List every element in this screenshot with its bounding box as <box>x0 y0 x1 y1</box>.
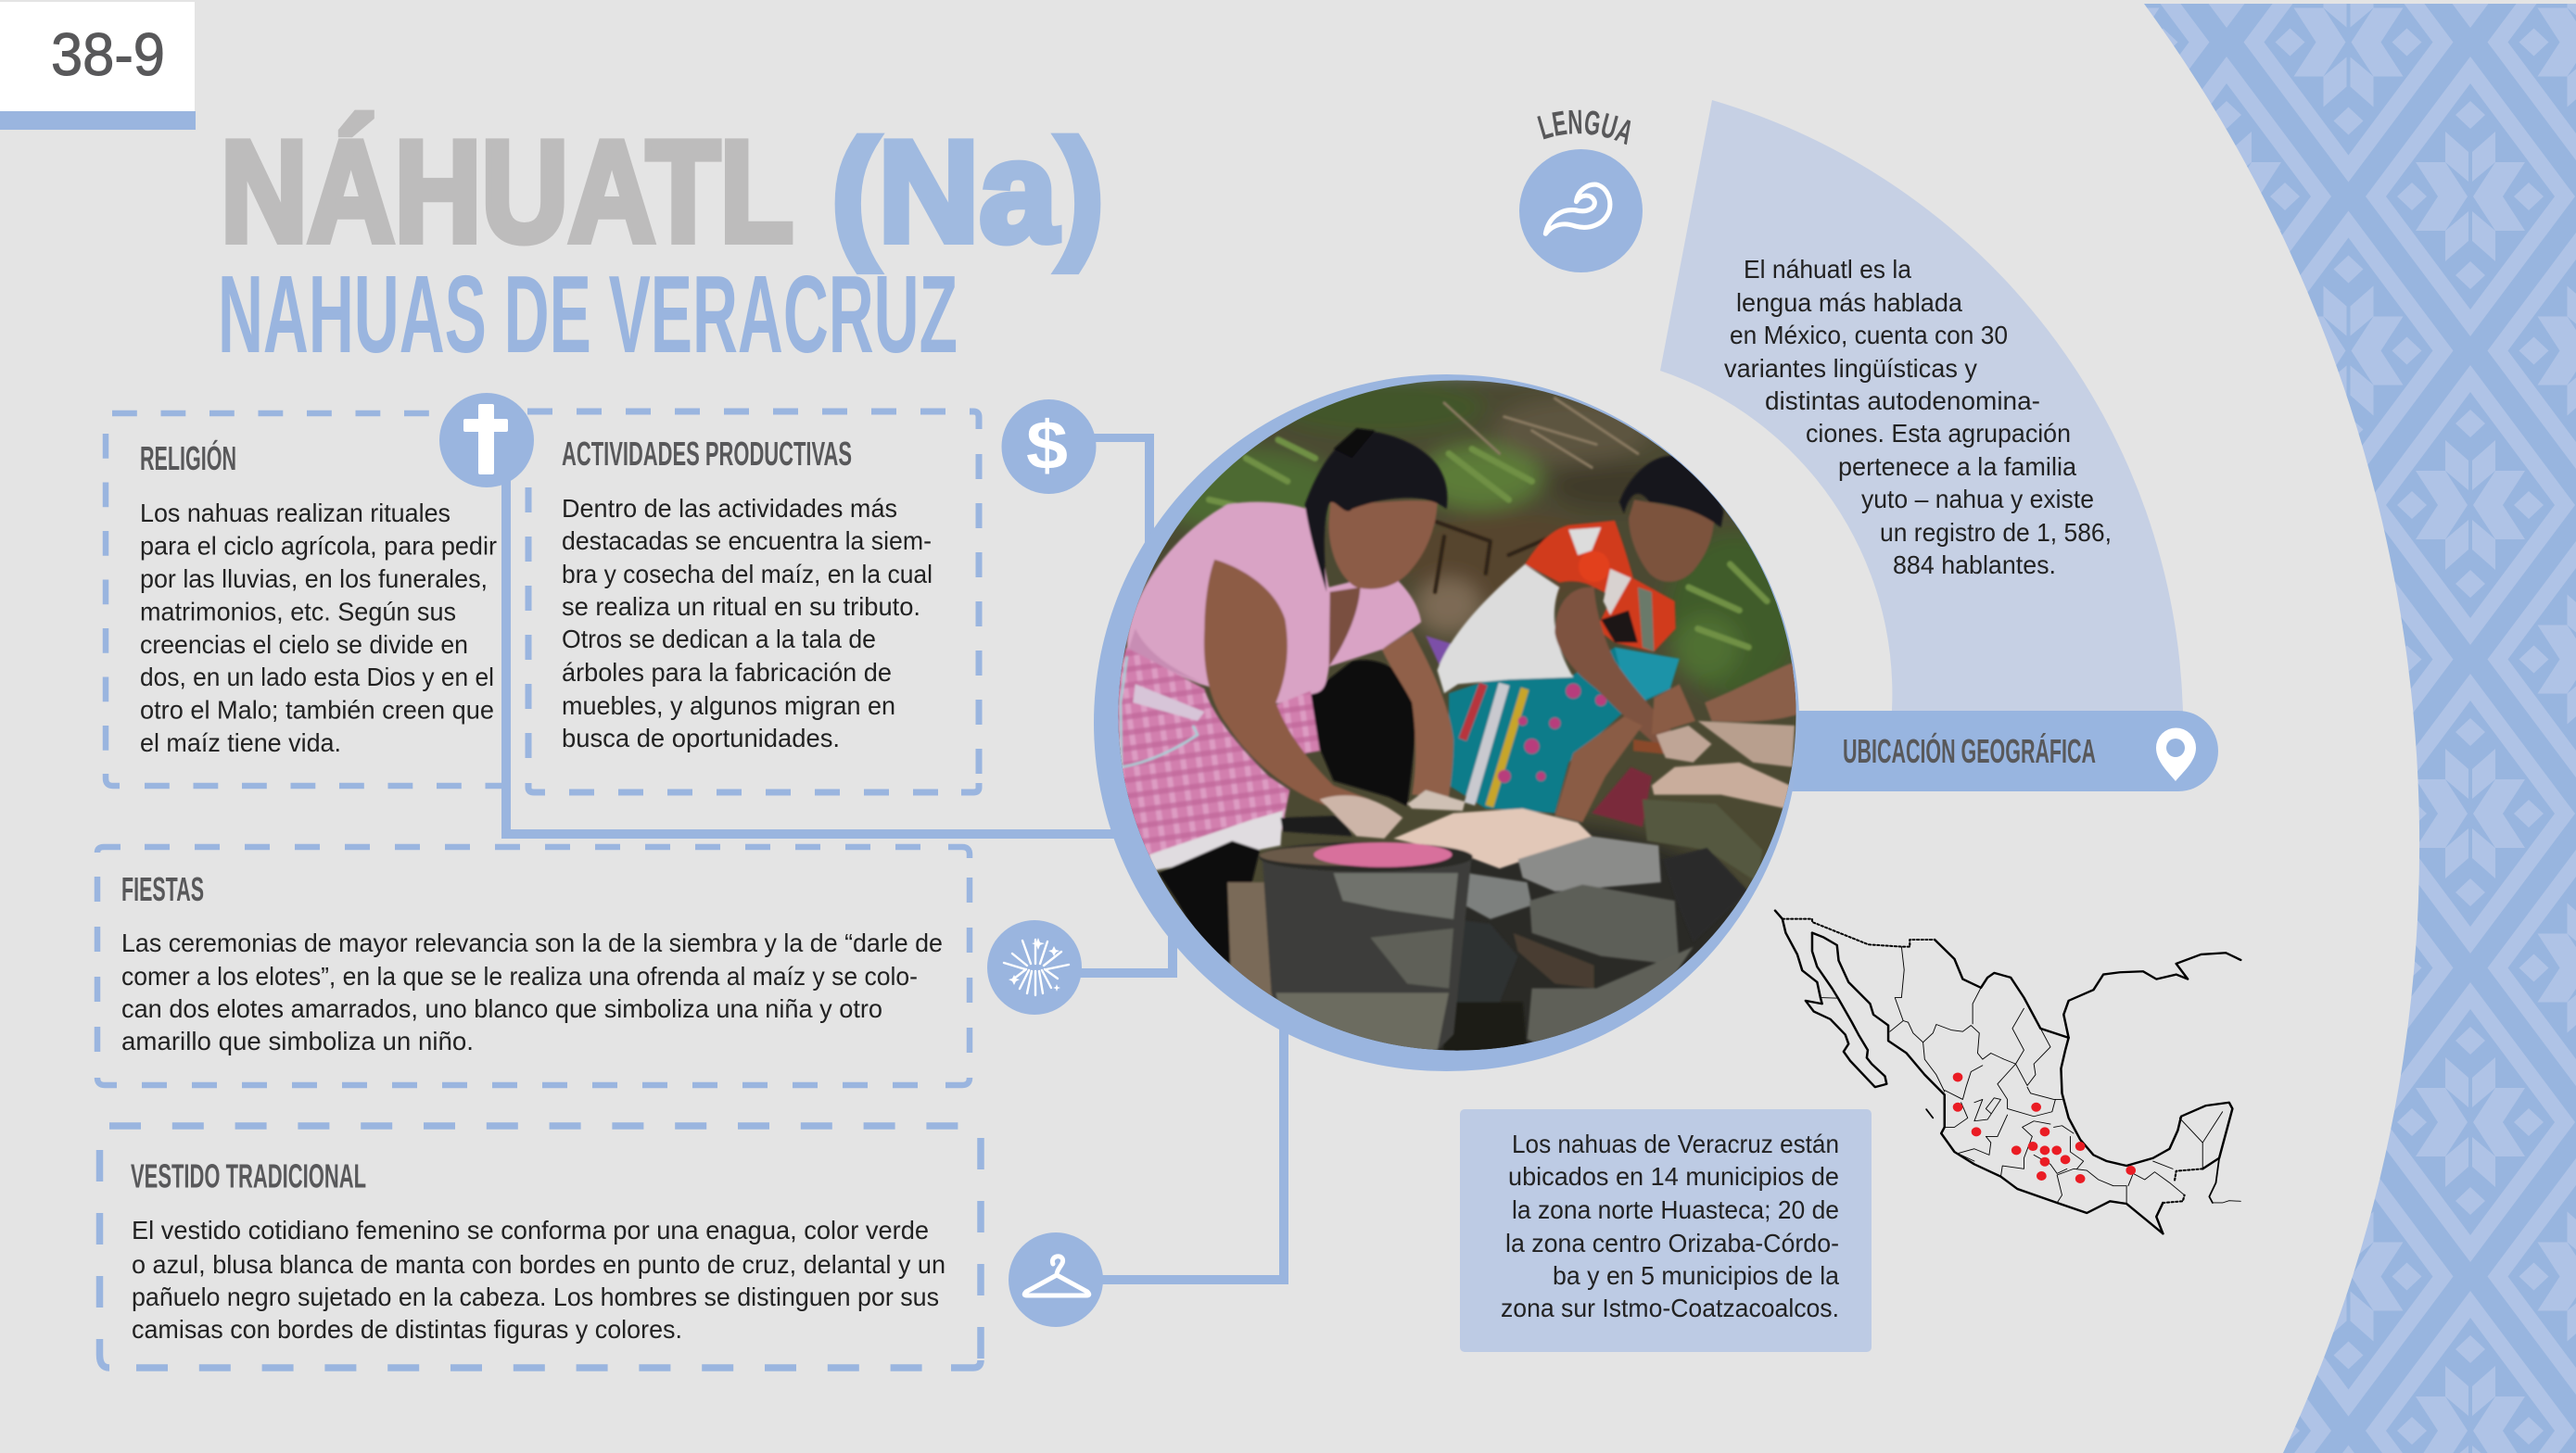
panel: religión <box>106 413 501 786</box>
icon: location pin <box>2156 728 2196 781</box>
text: vestido body <box>132 1216 945 1344</box>
icon: hanger <box>1009 1232 1103 1327</box>
basket <box>1426 635 1452 665</box>
panel: ubicación text box <box>1460 1109 1872 1352</box>
text: vestido body: pañuelo negro sujetado en la cabeza. Los hombres se distinguen por sus <box>132 1282 939 1311</box>
icon: speech scroll <box>1519 149 1643 272</box>
map of Mexico with red markers <box>1775 911 2240 1233</box>
left woman <box>1311 660 1415 806</box>
panel: fiestas <box>97 847 970 1085</box>
icon: dollar sign: $ <box>1026 407 1068 484</box>
text: lengua description: pertenece a la familia <box>1838 452 2077 481</box>
lengua heading curved <box>1537 109 1631 145</box>
heading: fiestas: FIESTAS <box>121 870 204 908</box>
text: religión body <box>140 499 497 757</box>
text: lengua description: 884 hablantes. <box>1893 550 2056 579</box>
lengua heading curved: LENGUA <box>1537 109 1631 145</box>
text: religión body: matrimonios, etc. Según sus <box>140 597 456 626</box>
text: vestido body: camisas con bordes de distintas figuras y colores. <box>132 1315 682 1344</box>
text: lengua description: lengua más hablada <box>1736 288 1963 317</box>
text: religión body: dos, en un lado esta Dios y en el <box>140 663 494 691</box>
text: ubicación description <box>1501 1130 1840 1322</box>
text: religión body: por las lluvias, en los funerales, <box>140 564 488 593</box>
text: ubicación description: ba y en 5 municipios de la <box>1553 1261 1840 1290</box>
title: NÁHUATL <box>221 111 793 272</box>
panel: lengua wedge <box>1660 100 2183 714</box>
text: fiestas body: comer a los elotes”, en la que se le realiza una ofrenda al maíz y se colo- <box>121 962 918 991</box>
icon: dollar sign <box>1001 399 1096 494</box>
title: (Na) <box>831 111 1104 272</box>
text: ubicación description: zona sur Istmo-Coatzacoalcos. <box>1501 1294 1839 1322</box>
text: religión body: Los nahuas realizan rituales <box>140 499 450 527</box>
text: ubicación description: Los nahuas de Veracruz están <box>1512 1130 1839 1158</box>
subtitle: NAHUAS DE VERACRUZ <box>218 253 958 376</box>
photo: two women washing with ring <box>1094 371 1817 1099</box>
text: lengua description: distintas autodenomina- <box>1765 386 2040 415</box>
page number tab <box>0 2 196 130</box>
background: woven blue pattern band <box>2144 4 2576 1453</box>
text: religión body: otro el Malo; también creen que <box>140 695 494 725</box>
text: actividades body: árboles para la fabricación de <box>562 658 892 687</box>
far arm <box>1705 661 1799 722</box>
heading: religión: RELIGIÓN <box>140 438 236 477</box>
icon: fireworks <box>987 920 1082 1015</box>
text: actividades body: se realiza un ritual en su tributo. <box>562 592 920 621</box>
text: fiestas body: can dos elotes amarrados, uno blanco que simboliza una niña y otro <box>121 994 882 1023</box>
red markers <box>1953 1072 2136 1183</box>
text: lengua description: ciones. Esta agrupación <box>1806 419 2071 448</box>
text: fiestas body <box>121 929 943 1055</box>
text: fiestas body: Las ceremonias de mayor relevancia son la de la siembra y la de “darle de <box>121 929 943 957</box>
page number tab: 38-9 <box>51 20 165 88</box>
panel: actividades productivas <box>527 411 979 792</box>
text: actividades body: bra y cosecha del maíz, en la cual <box>562 560 933 588</box>
dough right <box>1698 721 1795 767</box>
text: ubicación description: la zona centro Orizaba-Córdo- <box>1505 1229 1839 1257</box>
text: actividades body <box>562 494 933 752</box>
text: fiestas body: amarillo que simboliza un niño. <box>121 1027 474 1055</box>
text: lengua description: El náhuatl es la <box>1744 255 1912 284</box>
text: religión body: el maíz tiene vida. <box>140 728 341 757</box>
location bar <box>1669 711 2218 791</box>
text: lengua description: un registro de 1, 586, <box>1880 518 2112 547</box>
heading: vestido: VESTIDO TRADICIONAL <box>131 1156 366 1195</box>
text: ubicación description: la zona norte Huasteca; 20 de <box>1512 1195 1839 1224</box>
text: actividades body: muebles, y algunos migran en <box>562 691 895 720</box>
text: lengua description: yuto – nahua y existe <box>1861 485 2094 513</box>
ground and rocks <box>1227 882 1288 1053</box>
text: vestido body: El vestido cotidiano femenino se conforma por una enagua, color verde <box>132 1216 929 1245</box>
text: religión body: creencias el cielo se divide en <box>140 630 468 659</box>
right woman <box>1449 647 1680 814</box>
text: religión body: para el ciclo agrícola, para pedir <box>140 532 497 560</box>
heading: actividades: ACTIVIDADES PRODUCTIVAS <box>562 435 852 473</box>
text: lengua description: en México, cuenta con 30 <box>1730 321 2008 349</box>
text: ubicación description: ubicados en 14 municipios de <box>1508 1162 1839 1191</box>
text: lengua description: variantes lingüísticas y <box>1724 354 1977 383</box>
panel: vestido tradicional <box>100 1126 981 1368</box>
text: actividades body: busca de oportunidades. <box>562 724 840 752</box>
connector lines <box>501 434 1288 1284</box>
text: actividades body: Otros se dedican a la tala de <box>562 625 876 653</box>
text: actividades body: destacadas se encuentra la siem- <box>562 526 932 555</box>
text: lengua description <box>1724 255 2112 579</box>
location bar: UBICACIÓN GEOGRÁFICA <box>1843 731 2096 770</box>
text: actividades body: Dentro de las actividades más <box>562 494 897 523</box>
icon: cross <box>439 393 534 487</box>
text: vestido body: o azul, blusa blanca de manta con bordes en punto de cruz, delantal y un <box>132 1250 945 1279</box>
